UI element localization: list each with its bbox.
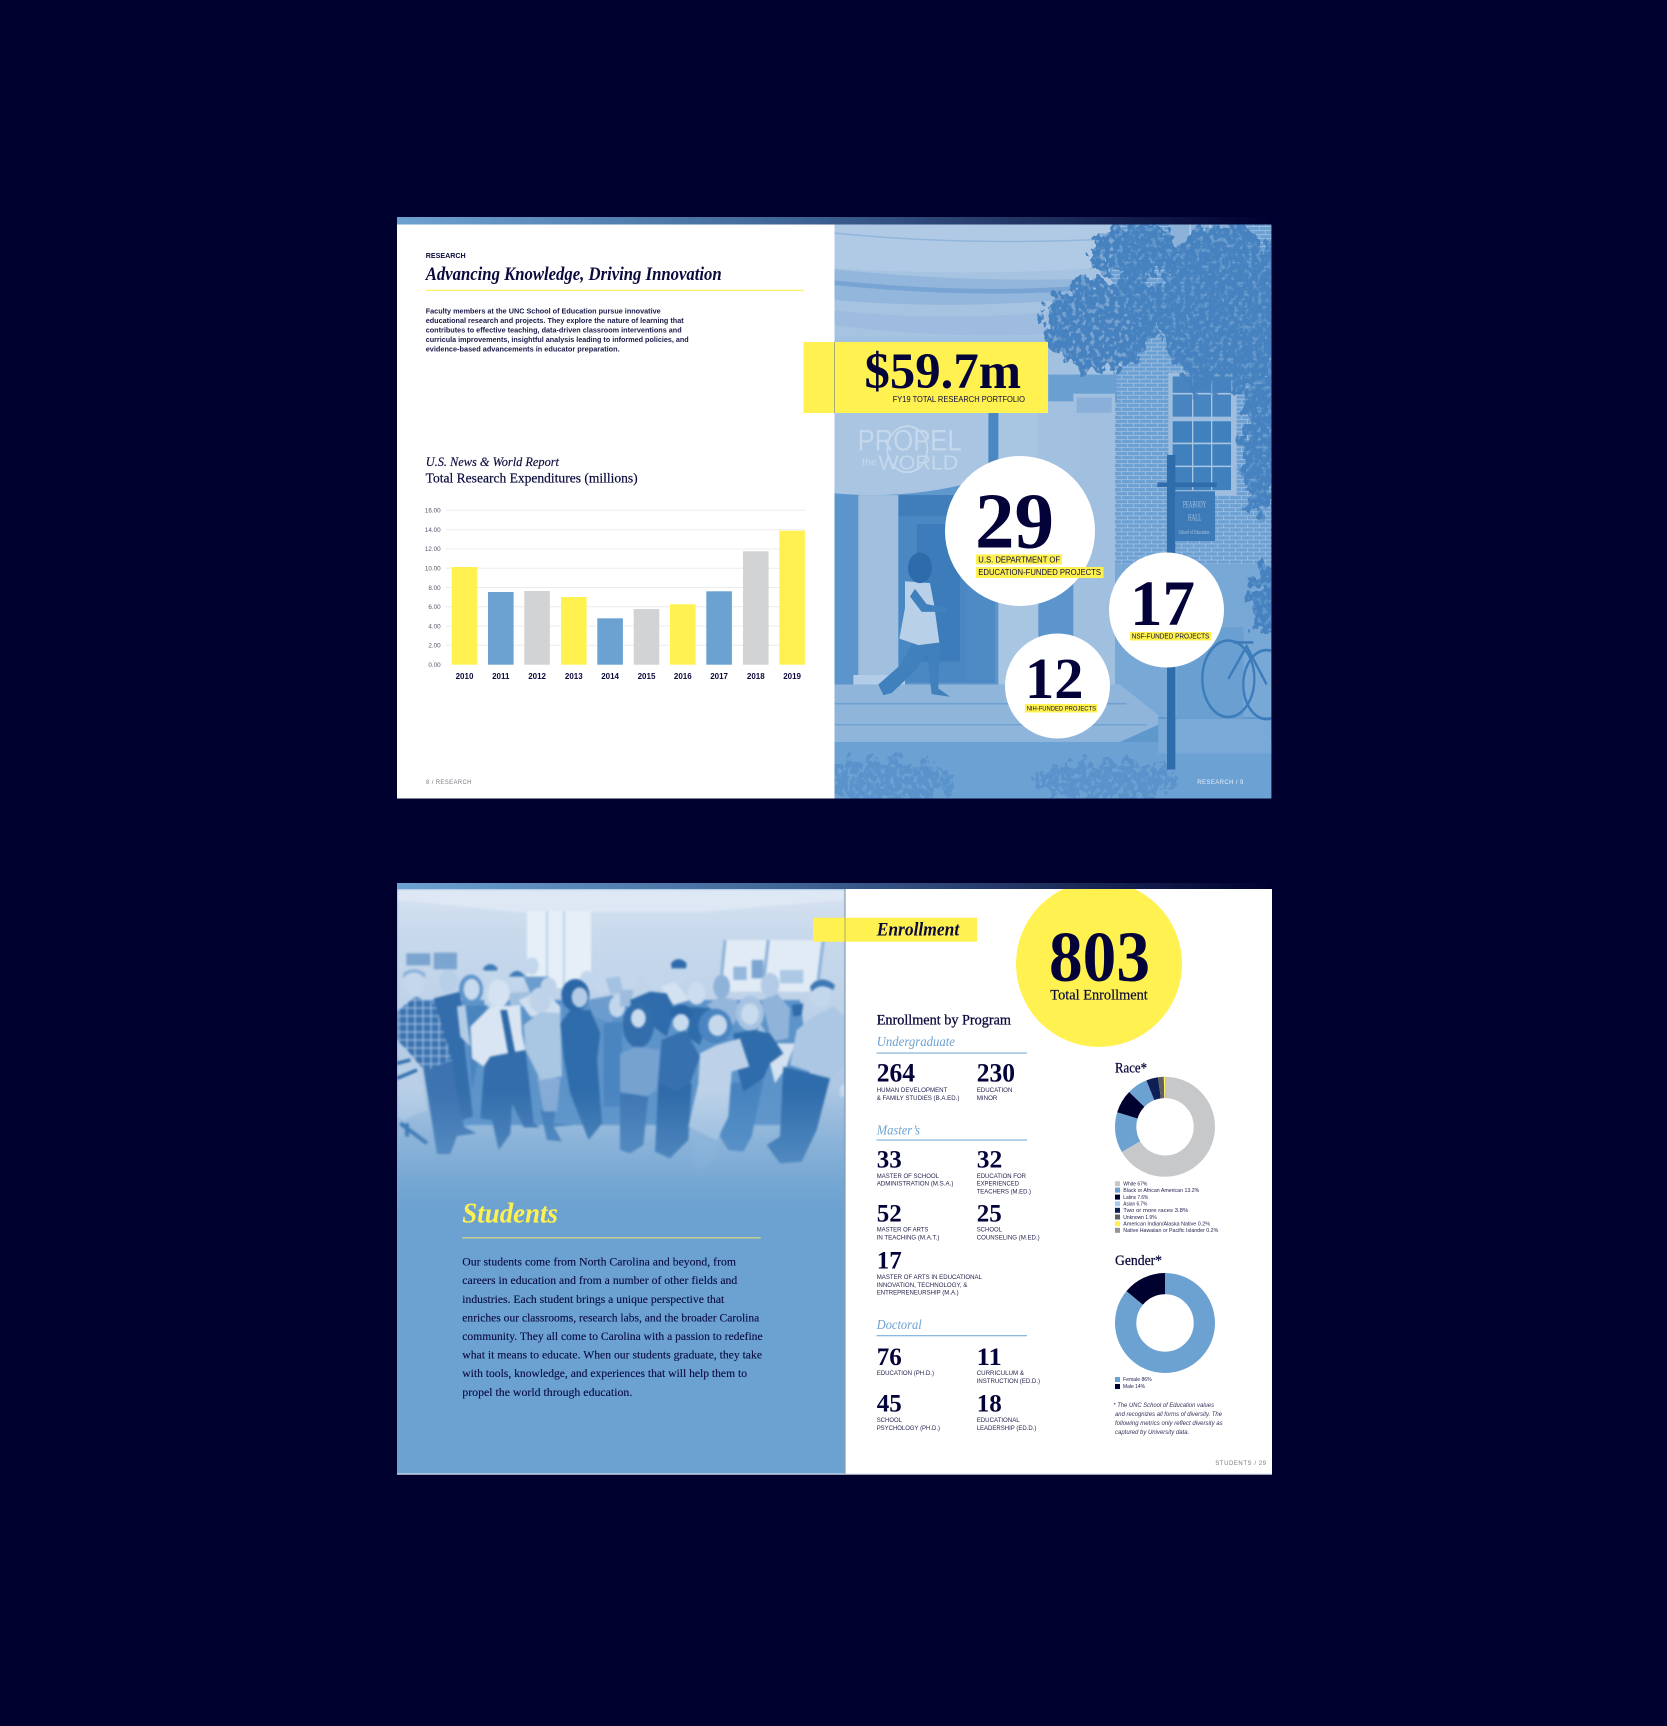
text block: students intro: enriches our classrooms, research labs, and the broader Carolina bbox=[462, 1310, 760, 1324]
text block: students intro: propel the world through education. bbox=[462, 1385, 632, 1399]
woman in white dress bbox=[692, 1140, 717, 1171]
bar chart: research expenditures: 2012 bbox=[528, 672, 547, 681]
group: doctoral: 76 bbox=[877, 1342, 902, 1371]
panel: research spread bbox=[397, 217, 1290, 803]
photo fade bbox=[397, 1104, 844, 1210]
text block: students intro: what it means to educate. When our students graduate, they take bbox=[462, 1348, 762, 1362]
group: master's: 52 bbox=[877, 1198, 902, 1227]
stat: 12 NIH-funded projects: 12 bbox=[1025, 646, 1084, 711]
group: master's: Master’s bbox=[876, 1122, 920, 1137]
steps and ground bbox=[833, 685, 1158, 742]
group: doctoral: Doctoral bbox=[876, 1317, 922, 1332]
stat: 12 NIH-funded projects: NIH-FUNDED PROJECTS bbox=[1027, 706, 1097, 713]
group: doctoral: LEADERSHIP (ED.D.) bbox=[977, 1425, 1036, 1432]
group: undergraduate bbox=[876, 1034, 1027, 1102]
group: master's: IN TEACHING (M.A.T.) bbox=[877, 1235, 939, 1242]
group: doctoral: 18 bbox=[977, 1389, 1002, 1418]
panel: students blue page bbox=[397, 889, 845, 1474]
group: doctoral: 45 bbox=[877, 1389, 902, 1418]
bar chart: research expenditures: 2.00 bbox=[428, 643, 441, 650]
text block: research intro: educational research and projects. They explore the nature of learning that bbox=[426, 316, 684, 325]
callout: $59.7m research portfolio: $59.7m bbox=[864, 343, 1021, 399]
bar chart: research expenditures: 16.00 bbox=[425, 508, 441, 515]
group: master's: COUNSELING (M.ED.) bbox=[977, 1235, 1040, 1242]
signpost: School of Education bbox=[1179, 528, 1210, 536]
group: undergraduate: EDUCATION bbox=[977, 1087, 1013, 1094]
person in denim jacket bbox=[655, 1083, 692, 1158]
heading: students: Students bbox=[462, 1198, 558, 1230]
legend: gender bbox=[1115, 1377, 1152, 1390]
bar chart: research expenditures: 2019 bbox=[783, 672, 802, 681]
chart title: Total Research Expenditures (millions) bbox=[426, 471, 638, 486]
footnote: diversity: captured by University data. bbox=[1115, 1429, 1189, 1436]
group: doctoral: INSTRUCTION (ED.D.) bbox=[977, 1378, 1040, 1385]
group: master's: ENTREPRENEURSHIP (M.A.) bbox=[877, 1290, 959, 1297]
back row, right bbox=[620, 990, 633, 1007]
group: undergraduate: & FAMILY STUDIES (B.A.ED.) bbox=[877, 1095, 959, 1102]
stat: 803 total enrollment bbox=[1016, 881, 1182, 1047]
legend: race: Latinx 7.6% bbox=[1123, 1195, 1148, 1201]
chart title bbox=[426, 454, 638, 486]
banner text: Propel the World: WORLD bbox=[878, 451, 958, 474]
top gradient bar bbox=[397, 883, 1272, 890]
group: undergraduate: 264 bbox=[877, 1059, 915, 1088]
callout: $59.7m research portfolio: FY19 TOTAL RESEARCH PORTFOLIO bbox=[893, 394, 1025, 404]
stat: 803 total enrollment: 803 bbox=[1049, 917, 1150, 997]
woman in dark polo bbox=[720, 1080, 763, 1152]
label: enrollment: Enrollment bbox=[876, 920, 960, 941]
callout: $59.7m research portfolio bbox=[804, 342, 1048, 413]
bar chart: research expenditures: 2010 bbox=[456, 672, 474, 681]
bar chart: research expenditures: 2018 bbox=[747, 672, 765, 681]
text block: research intro: Faculty members at the UNC School of Education pursue innovative bbox=[426, 306, 661, 315]
bar chart: research expenditures: 2013 bbox=[565, 672, 583, 681]
bar chart: research expenditures: 2017 bbox=[710, 672, 729, 681]
stat: 17 NSF-funded projects bbox=[1109, 552, 1224, 668]
group: master's: 32 bbox=[977, 1144, 1002, 1173]
group: master's: TEACHERS (M.ED.) bbox=[977, 1188, 1031, 1195]
text block: students intro: with tools, knowledge, and experiences that will help them to bbox=[462, 1366, 747, 1380]
shrubs bbox=[823, 757, 1177, 803]
woman with long hair bbox=[620, 1093, 648, 1153]
bar chart: research expenditures: 6.00 bbox=[428, 604, 441, 611]
man with tie bbox=[480, 1048, 540, 1150]
group: master's: 25 bbox=[977, 1198, 1002, 1227]
footnote: diversity: and recognizes all forms of diversity. The bbox=[1115, 1411, 1222, 1418]
stat: 29 education-funded projects: U.S. DEPARTMENT OF bbox=[978, 555, 1060, 564]
left half of the group bbox=[397, 953, 625, 1154]
donut chart: race bbox=[1126, 1087, 1204, 1166]
man with plaid shirt bbox=[424, 1060, 476, 1154]
text block: research intro: curricula improvements, insightful analysis leading to informed policies, and bbox=[426, 335, 689, 344]
group: master's: MASTER OF SCHOOL bbox=[877, 1173, 939, 1180]
man in dark polo bbox=[434, 992, 473, 1120]
text block: students intro: industries. Each student brings a unique perspective that bbox=[462, 1292, 725, 1306]
group: undergraduate: 230 bbox=[977, 1059, 1015, 1088]
group: master's: SCHOOL bbox=[977, 1227, 1002, 1234]
bar chart: research expenditures bbox=[425, 508, 805, 681]
legend: race: Unknown 1.9% bbox=[1123, 1215, 1157, 1221]
bar chart: research expenditures: 2015 bbox=[638, 672, 656, 681]
heading: advancing knowledge: Advancing Knowledge, Driving Innovation bbox=[425, 265, 722, 285]
woman behind bbox=[466, 1004, 488, 1085]
text block: research intro: evidence-based advancements in educator preparation. bbox=[426, 345, 620, 354]
group: master's: 33 bbox=[877, 1144, 902, 1173]
man in light t-shirt bbox=[518, 996, 562, 1018]
panel: students right page bbox=[845, 889, 1272, 1474]
group: doctoral: EDUCATION (PH.D.) bbox=[877, 1370, 934, 1377]
walking woman bbox=[878, 553, 950, 697]
group: master's: ADMINISTRATION (M.S.A.) bbox=[877, 1181, 953, 1188]
text block: research intro: contributes to effective teaching, data-driven classroom interventions and bbox=[426, 325, 682, 334]
stat: 29 education-funded projects bbox=[945, 456, 1104, 606]
window bbox=[1168, 225, 1237, 495]
banner text: Propel the World: the bbox=[862, 457, 877, 468]
stat: 17 NSF-funded projects: NSF-FUNDED PROJECTS bbox=[1132, 634, 1210, 641]
group: master's bbox=[876, 1122, 1040, 1297]
tree foliage bbox=[1043, 221, 1287, 639]
group: doctoral: SCHOOL bbox=[877, 1417, 902, 1424]
group: undergraduate: MINOR bbox=[977, 1095, 998, 1102]
text block: students intro: Our students come from North Carolina and beyond, from bbox=[462, 1254, 736, 1268]
text block: students intro: community. They all come to Carolina with a passion to redefine bbox=[462, 1329, 763, 1343]
group: doctoral: CURRICULUM & bbox=[977, 1370, 1025, 1377]
stat: 17 NSF-funded projects: 17 bbox=[1130, 568, 1195, 640]
photo: group of students bbox=[397, 889, 845, 1210]
bar chart: research expenditures: 2011 bbox=[492, 672, 510, 681]
group: doctoral: PSYCHOLOGY (PH.D.) bbox=[877, 1425, 940, 1432]
stat: 29 education-funded projects: 29 bbox=[975, 478, 1054, 566]
signpost: PEABODY bbox=[1183, 499, 1206, 510]
footer: students / 29: STUDENTS / 29 bbox=[1215, 1461, 1267, 1467]
banner text: Propel the World bbox=[858, 424, 962, 474]
legend: gender: Female 86% bbox=[1123, 1377, 1152, 1383]
woman in dark top bbox=[560, 1010, 602, 1140]
text block: students intro: careers in education and from a number of other fields and bbox=[462, 1273, 737, 1287]
group: master's: EDUCATION FOR bbox=[977, 1173, 1026, 1180]
group: doctoral bbox=[876, 1317, 1040, 1432]
legend: race: Two or more races 3.8% bbox=[1123, 1208, 1189, 1214]
footer: research / 9: RESEARCH / 9 bbox=[1197, 780, 1244, 786]
panel: research left page bbox=[397, 224, 834, 798]
text block: students intro bbox=[462, 1254, 763, 1399]
footnote: diversity: following metrics only reflect diversity as bbox=[1115, 1420, 1224, 1427]
group: undergraduate: Undergraduate bbox=[877, 1034, 955, 1049]
legend: race: White 67% bbox=[1123, 1182, 1147, 1188]
right half of the group bbox=[620, 940, 845, 1171]
bar chart: research expenditures: 12.00 bbox=[425, 546, 441, 553]
bar chart: research expenditures: 8.00 bbox=[428, 585, 441, 592]
group: master's: MASTER OF ARTS bbox=[877, 1227, 928, 1234]
man at the right bbox=[767, 1067, 830, 1163]
top gradient bar bbox=[397, 217, 1272, 225]
group: master's: EXPERIENCED bbox=[977, 1181, 1019, 1188]
bar chart: research expenditures: 2014 bbox=[601, 672, 620, 681]
photo: Peabody Hall building bbox=[823, 221, 1290, 803]
group: master's: 17 bbox=[877, 1246, 902, 1275]
heading: race: Race* bbox=[1115, 1061, 1147, 1077]
banner text: Propel the World: PROPEL bbox=[858, 424, 962, 457]
legend: race: Black or African American 13.2% bbox=[1123, 1188, 1199, 1194]
group: master's: MASTER OF ARTS IN EDUCATIONAL bbox=[877, 1274, 982, 1281]
footnote: diversity: * The UNC School of Education values bbox=[1113, 1402, 1215, 1409]
back row, left bbox=[526, 956, 592, 988]
mass of bodies behind the front row bbox=[425, 1000, 812, 1130]
label: enrollment bbox=[813, 918, 977, 942]
footnote: diversity bbox=[1113, 1402, 1224, 1436]
legend: race: American Indian/Alaska Native 0.2% bbox=[1123, 1222, 1210, 1228]
bar chart: research expenditures: 4.00 bbox=[428, 623, 441, 630]
stat: 12 NIH-funded projects bbox=[1005, 634, 1110, 738]
legend: race: Asian 6.7% bbox=[1123, 1202, 1147, 1208]
footer: 8 / research: 8 / RESEARCH bbox=[426, 780, 472, 786]
group: doctoral: 11 bbox=[977, 1342, 1002, 1371]
group: undergraduate: HUMAN DEVELOPMENT bbox=[877, 1087, 948, 1094]
heading: gender: Gender* bbox=[1115, 1253, 1162, 1269]
stat: 29 education-funded projects: EDUCATION-FUNDED PROJECTS bbox=[978, 568, 1101, 577]
donut chart: gender bbox=[1126, 1284, 1204, 1362]
group: master's: INNOVATION, TECHNOLOGY, & bbox=[877, 1282, 968, 1289]
signpost: HALL bbox=[1188, 512, 1201, 523]
legend: race bbox=[1115, 1181, 1219, 1234]
bicycle bbox=[1201, 639, 1272, 720]
panel: students spread bbox=[397, 881, 1272, 1475]
text block: research intro bbox=[426, 306, 689, 354]
heading: enrollment by program: Enrollment by Program bbox=[877, 1012, 1012, 1028]
bar chart: research expenditures: 2016 bbox=[674, 672, 692, 681]
stat: 803 total enrollment: Total Enrollment bbox=[1050, 987, 1148, 1003]
chart title: U.S. News & World Report bbox=[426, 454, 559, 469]
bar chart: research expenditures: 10.00 bbox=[425, 566, 441, 573]
legend: race: Native Hawaiian or Pacific Islander 0.2% bbox=[1123, 1228, 1219, 1234]
section label: research: RESEARCH bbox=[426, 251, 466, 260]
bar chart: research expenditures: 14.00 bbox=[425, 527, 441, 534]
tree canopy underlayer bbox=[1043, 221, 1287, 639]
group: doctoral: EDUCATIONAL bbox=[977, 1417, 1020, 1424]
legend: gender: Male 14% bbox=[1123, 1384, 1145, 1390]
bar chart: research expenditures: 0.00 bbox=[428, 662, 441, 669]
woman at the seam bbox=[604, 1022, 622, 1107]
signpost bbox=[1157, 455, 1217, 770]
